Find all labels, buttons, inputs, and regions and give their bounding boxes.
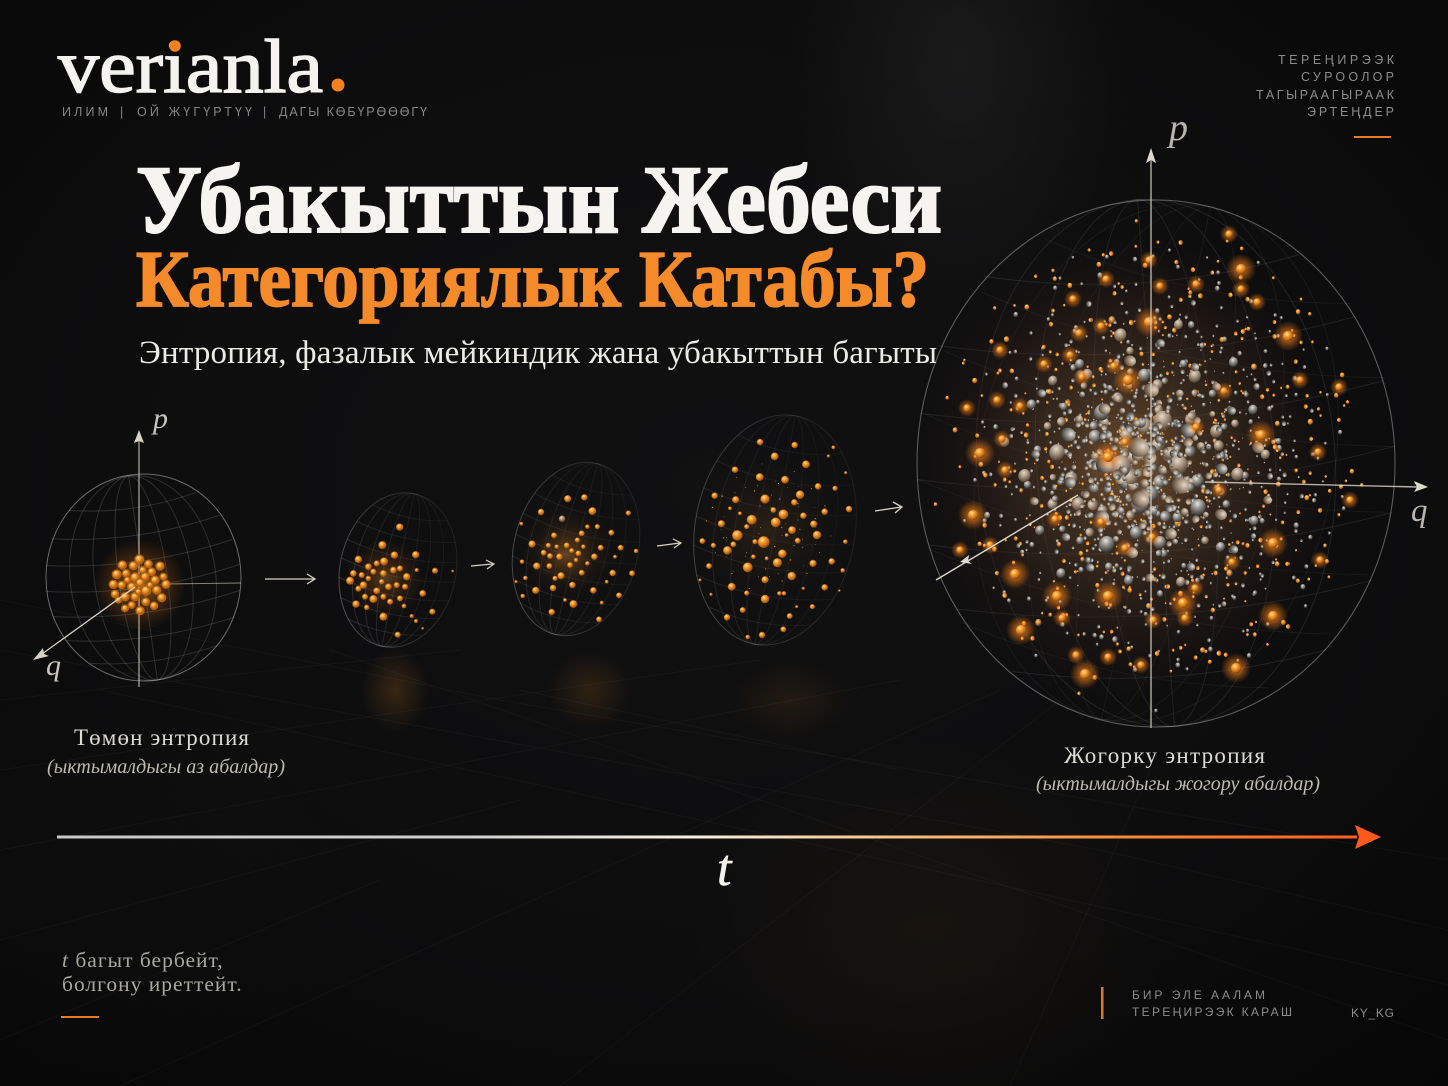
top-right note: ЭРТЕҢДЕР bbox=[1307, 105, 1394, 119]
silver particles bbox=[862, 137, 1436, 784]
glowing orange particles bbox=[951, 225, 1359, 689]
axis p bbox=[134, 430, 144, 687]
note text: t bbox=[62, 948, 69, 972]
sphere 1: low entropy bbox=[33, 402, 253, 693]
label: high entropy: (ыктымалдыгы жогору абалдар) bbox=[1036, 773, 1320, 795]
label t: t bbox=[717, 840, 733, 897]
logo orange dots bbox=[169, 40, 344, 92]
note text: БИР ЭЛЕ ААЛАМ bbox=[1132, 988, 1265, 1002]
label: high entropy bbox=[1036, 743, 1320, 795]
label: low entropy: Төмөн энтропия bbox=[74, 725, 249, 750]
arrow 4 bbox=[875, 502, 902, 513]
particle cluster bbox=[94, 539, 186, 631]
axis diagonal bbox=[936, 495, 1078, 580]
title line 2: Категориялык Катабы? bbox=[136, 236, 929, 324]
axis p bbox=[1146, 148, 1156, 728]
sphere 5: high entropy bbox=[862, 107, 1442, 784]
note text: багыт бербейт, bbox=[69, 948, 224, 972]
time arrow bbox=[57, 825, 1381, 849]
bottom-left note bbox=[61, 948, 243, 1018]
wire globe 4 bbox=[693, 414, 857, 646]
central haze bbox=[915, 225, 1345, 705]
top-right note: СУРООЛОР bbox=[1301, 70, 1394, 84]
top-right note: ТАГЫРААГЫРААК bbox=[1256, 88, 1395, 102]
wire globe 2 bbox=[338, 492, 458, 648]
note text bbox=[1132, 988, 1292, 1019]
particles 3 bbox=[515, 494, 638, 622]
axis q-horizontal bbox=[165, 583, 241, 584]
vertical accent bbox=[1101, 987, 1104, 1019]
wire globe 1 bbox=[33, 463, 253, 693]
sphere 2 bbox=[338, 492, 458, 648]
note text: ТЕРЕҢИРЭЭК КАРАШ bbox=[1132, 1005, 1292, 1019]
arrow 3 bbox=[657, 539, 681, 548]
top-right note bbox=[1256, 53, 1395, 138]
label: low entropy: (ыктымалдыгы аз абалдар) bbox=[47, 756, 285, 778]
large central particles bbox=[963, 276, 1314, 635]
logo tagline: | bbox=[263, 105, 266, 119]
note text: болгону иреттейт. bbox=[62, 972, 243, 996]
logo tagline: ДАГЫ КӨБҮРӨӨӨГҮ bbox=[279, 105, 427, 119]
logo tagline bbox=[62, 104, 427, 119]
label q: q bbox=[46, 649, 61, 682]
particles 4 bbox=[690, 439, 852, 639]
top-right note: ТЕРЕҢИРЭЭК bbox=[1278, 53, 1395, 67]
particle cloud bbox=[862, 133, 1441, 784]
logo: verianla bbox=[58, 25, 427, 119]
note accent line bbox=[61, 1016, 99, 1018]
label p: p bbox=[151, 402, 168, 435]
label p: p bbox=[1166, 107, 1188, 149]
label: low entropy bbox=[47, 725, 285, 778]
title line 1: Убакыттын Жебеси bbox=[136, 146, 942, 253]
title bbox=[136, 146, 942, 324]
logo tagline: | bbox=[120, 105, 123, 119]
particles 2 bbox=[346, 524, 454, 637]
axis q bbox=[1205, 481, 1428, 492]
arrow 1 bbox=[265, 574, 315, 584]
small orange particles bbox=[863, 133, 1441, 781]
logo tagline: ИЛИМ bbox=[62, 105, 108, 119]
logo wordmark: verianla bbox=[58, 25, 323, 109]
wire globe 5 bbox=[870, 157, 1442, 769]
logo tagline: ОЙ ЖҮГҮРТҮҮ bbox=[137, 104, 252, 119]
bottom-right note bbox=[1101, 987, 1394, 1020]
arrow 2 bbox=[471, 560, 494, 569]
sphere 3 bbox=[512, 462, 640, 636]
label: high entropy: Жогорку энтропия bbox=[1064, 743, 1265, 768]
axis q bbox=[33, 587, 135, 660]
sphere 4 bbox=[693, 414, 857, 646]
label q: q bbox=[1411, 493, 1428, 529]
subtitle: Энтропия, фазалык мейкиндик жана убакыттын багыты bbox=[139, 335, 937, 371]
wire globe 3 bbox=[512, 462, 640, 636]
locale code: KY_KG bbox=[1351, 1006, 1394, 1020]
floor grid bbox=[0, 600, 1448, 1086]
